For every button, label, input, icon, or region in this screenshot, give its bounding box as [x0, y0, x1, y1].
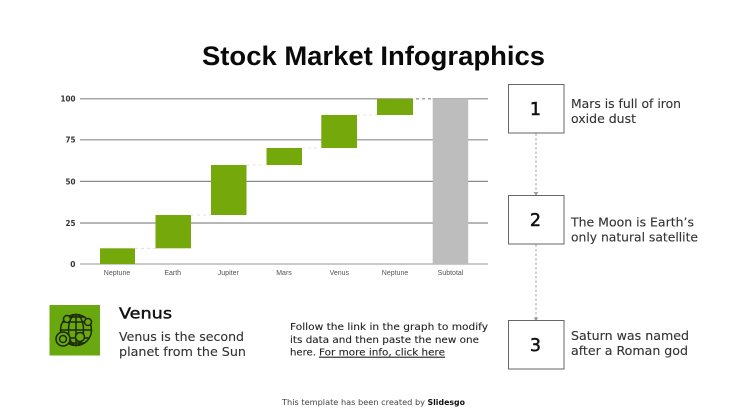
x axis labels: Neptune	[104, 270, 130, 277]
step 3 text: Saturn was named	[571, 329, 689, 343]
x axis labels: Neptune	[382, 270, 408, 277]
step 2 text	[570, 216, 698, 244]
note text: Follow the link in the graph to modify	[290, 322, 488, 333]
waterfall chart	[60, 94, 488, 277]
step 3 box: 3	[530, 336, 541, 356]
venus description	[119, 329, 246, 359]
y axis labels: 25	[66, 219, 76, 228]
step 1 text: Mars is full of iron	[571, 97, 681, 111]
x axis labels: Mars	[276, 270, 292, 277]
y axis labels: 75	[66, 136, 76, 144]
step 1 text	[571, 97, 681, 126]
y axis labels	[60, 94, 76, 269]
step 3 box	[508, 320, 564, 369]
step 3 text: after a Roman god	[571, 344, 688, 358]
x axis labels: Venus	[330, 270, 350, 277]
venus description: planet from the Sun	[119, 344, 246, 359]
step 2 text: only natural satellite	[571, 230, 698, 244]
subtotal bar	[433, 99, 468, 264]
step 2 box: 2	[530, 211, 541, 231]
note text: here.	[290, 348, 316, 359]
step 2 box	[508, 196, 564, 244]
x axis labels	[104, 270, 464, 277]
credits: This template has been created by	[281, 398, 426, 407]
step 2 text: The Moon is Earth’s	[570, 216, 694, 230]
x axis labels: Earth	[164, 270, 181, 277]
title: Stock Market Infographics	[202, 41, 545, 71]
x axis labels: Jupiter	[218, 270, 239, 277]
y axis labels: 100	[60, 94, 76, 104]
note text: its data and then paste the new one	[290, 335, 479, 346]
step 1 box: 1	[530, 100, 541, 120]
arrow: 1 to 2	[535, 134, 537, 195]
y axis labels: 0	[70, 260, 76, 269]
venus heading: Venus	[119, 304, 172, 322]
x axis labels: Subtotal	[438, 270, 464, 277]
step 1 box	[508, 84, 564, 133]
step 1 text: oxide dust	[571, 112, 636, 126]
step 3 text	[571, 329, 689, 358]
y axis labels: 50	[66, 178, 76, 186]
note text	[290, 322, 488, 359]
note text: For more info, click here	[319, 348, 445, 359]
bars	[100, 99, 413, 264]
venus text block	[119, 304, 246, 359]
venus description: Venus is the second	[119, 329, 244, 344]
credits: Slidesgo	[428, 398, 465, 407]
arrow: 2 to 3	[535, 244, 537, 320]
icon: globe with coins	[50, 305, 100, 356]
